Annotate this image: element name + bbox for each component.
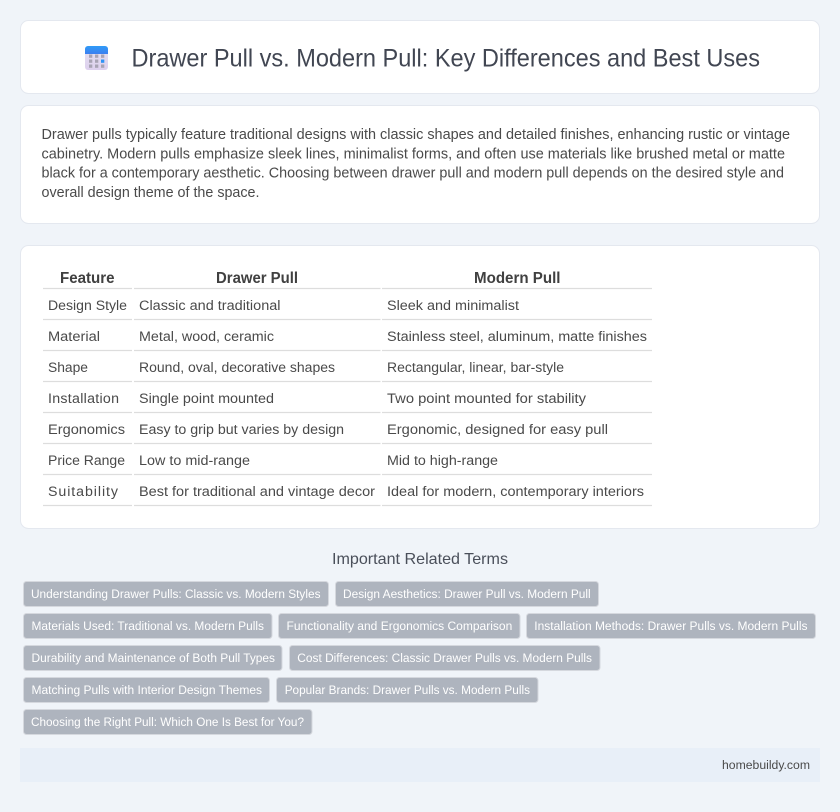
title: Drawer Pull vs. Modern Pull: Key Differences and Best Uses	[132, 44, 760, 72]
footer bar	[20, 748, 820, 782]
text block: introduction paragraph: black for a contemporary aesthetic. Choosing between drawer pull and modern pull depends on the desired style and	[42, 166, 784, 182]
footer source text: homebuildy.com	[722, 758, 810, 772]
table row: price range: Low to mid-range	[139, 453, 250, 469]
tag: understanding drawer pulls: Understanding Drawer Pulls: Classic vs. Modern Styles	[31, 587, 320, 601]
text block: introduction paragraph: overall design theme of the space.	[42, 185, 260, 201]
tag: installation methods: Installation Methods: Drawer Pulls vs. Modern Pulls	[534, 619, 808, 633]
table row: price range	[48, 453, 498, 469]
tag: design aesthetics: Design Aesthetics: Drawer Pull vs. Modern Pull	[343, 587, 591, 601]
icon: calendar grid	[85, 46, 108, 70]
table row: shape	[48, 360, 564, 376]
tag: cost differences	[290, 646, 600, 670]
table row: suitability: Ideal for modern, contemporary interiors	[387, 484, 644, 500]
table row: material: Material	[48, 329, 100, 345]
table row: price range: Price Range	[48, 453, 125, 469]
table row: installation: Single point mounted	[139, 391, 274, 407]
table header: Feature	[60, 270, 115, 287]
tag: materials used	[24, 614, 272, 638]
tag: durability and maintenance: Durability and Maintenance of Both Pull Types	[32, 651, 275, 665]
heading: important related terms: Important Related Terms	[332, 551, 508, 568]
tag: popular brands	[276, 678, 538, 702]
related term tags	[24, 582, 816, 734]
text block: introduction paragraph: cabinetry. Modern pulls emphasize sleek lines, minimalist forms, and often use materials like brushed metal or matte	[42, 146, 785, 162]
table row: installation: Installation	[48, 391, 119, 407]
tag: durability and maintenance	[24, 646, 282, 670]
table row: suitability	[48, 484, 644, 500]
table row: ergonomics: Easy to grip but varies by design	[139, 422, 344, 438]
tag: popular brands: Popular Brands: Drawer Pulls vs. Modern Pulls	[285, 683, 530, 697]
table row: installation: Two point mounted for stability	[387, 391, 587, 407]
table row: design style: Sleek and minimalist	[387, 298, 519, 314]
table row: price range: Mid to high-range	[387, 453, 498, 469]
tag: matching pulls: Matching Pulls with Interior Design Themes	[32, 683, 262, 697]
tag: choosing the right pull: Choosing the Right Pull: Which One Is Best for You?	[31, 715, 304, 729]
tag: materials used: Materials Used: Traditional vs. Modern Pulls	[32, 619, 264, 633]
text block: introduction paragraph	[42, 127, 790, 201]
table header: Drawer Pull	[216, 270, 298, 287]
tag: installation methods	[526, 614, 816, 638]
panel: comparison table	[20, 246, 820, 528]
tag: choosing the right pull	[24, 710, 312, 734]
text block: introduction paragraph: Drawer pulls typically feature traditional designs with classic shapes and detailed finishes, enhancing rustic or vintage	[42, 127, 790, 143]
table row: material	[48, 329, 647, 345]
table row: material: Metal, wood, ceramic	[139, 329, 274, 345]
table row: ergonomics	[48, 422, 608, 438]
table header	[60, 270, 560, 287]
tag: cost differences: Cost Differences: Classic Drawer Pulls vs. Modern Pulls	[297, 651, 592, 665]
table row: shape: Round, oval, decorative shapes	[139, 360, 335, 376]
table row: design style	[48, 298, 519, 314]
tag: functionality and ergonomics	[278, 614, 520, 638]
table header: Modern Pull	[474, 270, 560, 287]
panel: header	[20, 20, 820, 94]
table row: shape: Shape	[48, 360, 88, 376]
tag: matching pulls	[24, 678, 270, 702]
table row: ergonomics: Ergonomic, designed for easy pull	[387, 422, 608, 438]
tag: design aesthetics	[336, 582, 598, 606]
tag: functionality and ergonomics: Functionality and Ergonomics Comparison	[286, 619, 512, 633]
table row: ergonomics: Ergonomics	[48, 422, 125, 438]
tag: understanding drawer pulls	[24, 582, 328, 606]
table row: design style: Design Style	[48, 298, 127, 314]
panel: introduction	[20, 106, 820, 224]
table row: shape: Rectangular, linear, bar-style	[387, 360, 564, 376]
table row: suitability: Best for traditional and vintage decor	[139, 484, 375, 500]
table row: material: Stainless steel, aluminum, matte finishes	[387, 329, 647, 345]
table row: installation	[48, 391, 587, 407]
table row: suitability: Suitability	[48, 484, 119, 500]
table row: design style: Classic and traditional	[139, 298, 280, 314]
